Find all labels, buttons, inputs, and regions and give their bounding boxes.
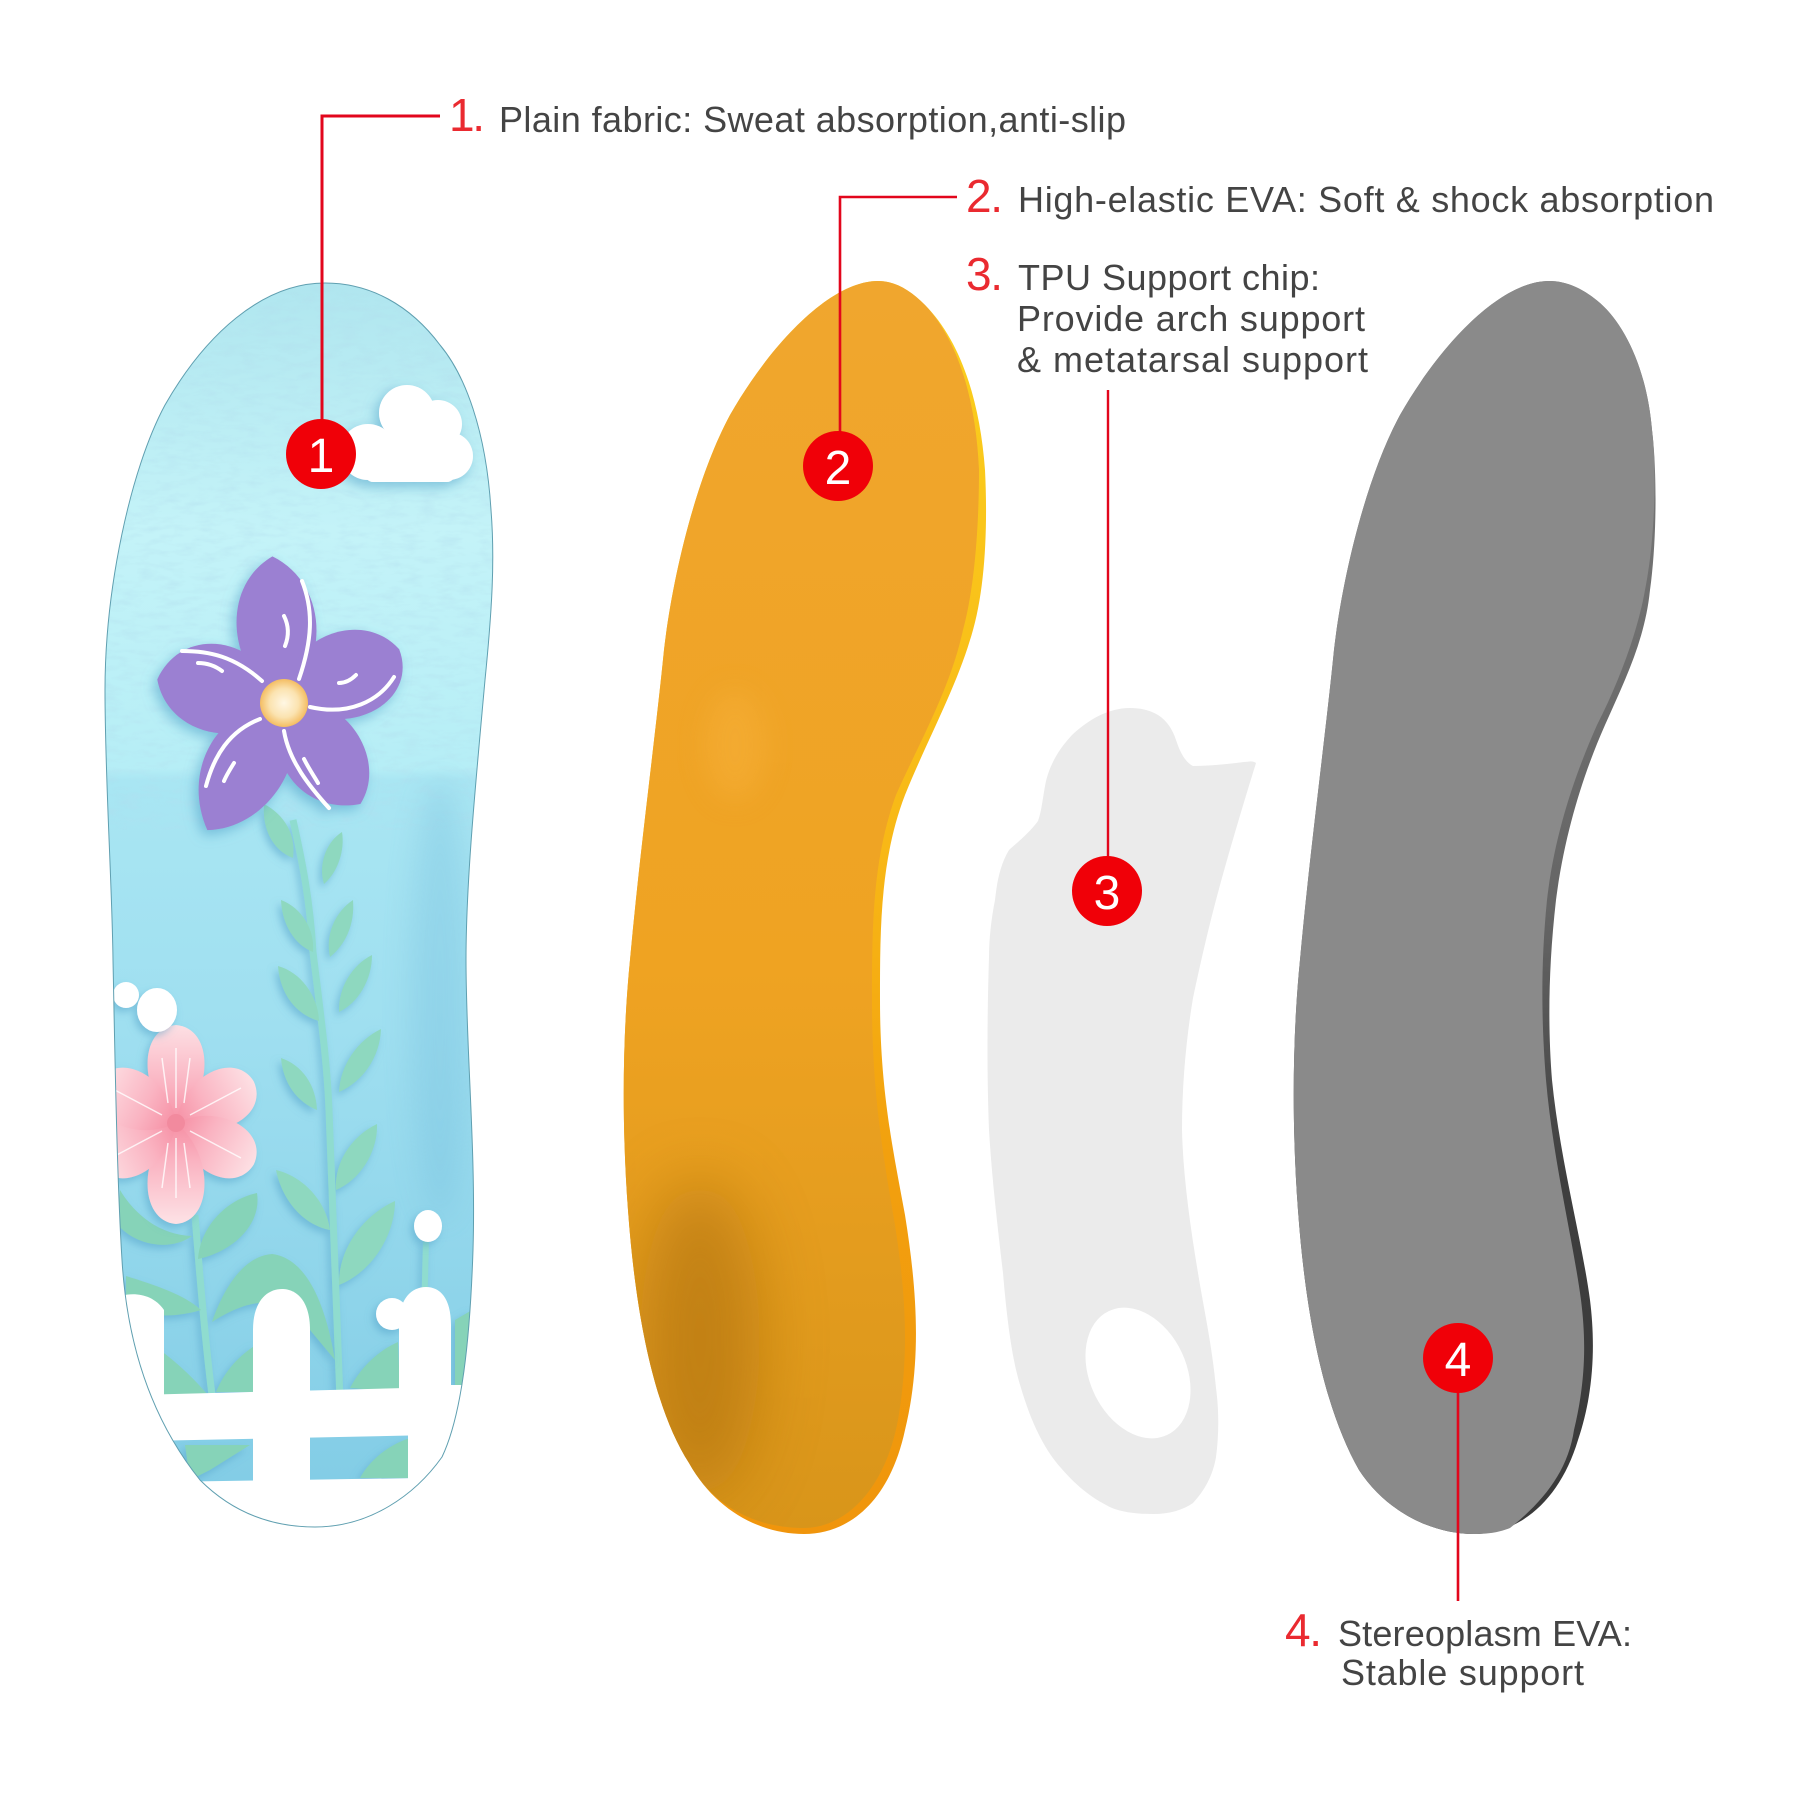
marker 3: 3 [1094, 867, 1120, 920]
leader line 4 [1457, 1385, 1459, 1601]
garden plants [118, 1190, 472, 1480]
label 3: & metatarsal support [1017, 339, 1368, 380]
label 1: 1. [449, 89, 485, 141]
TPU support chip 3 [988, 708, 1256, 1514]
label 3: TPU Support chip: [1018, 257, 1320, 298]
marker 4 [1423, 1323, 1493, 1393]
label 4 [1285, 1604, 1632, 1693]
label 2: 2. [966, 170, 1003, 222]
marker 1: 1 [308, 430, 334, 483]
icon: purple flower [148, 554, 414, 850]
label 2: High-elastic EVA: Soft & shock absorption [1018, 179, 1714, 220]
leader line 2 [840, 197, 957, 440]
picket fence [126, 1287, 462, 1526]
label 3: 3. [966, 248, 1003, 300]
label 3: Provide arch support [1017, 298, 1365, 339]
label 1: Plain fabric: Sweat absorption,anti-slip [499, 99, 1126, 140]
marker 2 [803, 431, 873, 501]
leader line 3 [1107, 390, 1109, 860]
label 4: Stable support [1341, 1652, 1584, 1693]
leader line 1 [322, 116, 440, 425]
icon: pink flower [116, 1025, 257, 1230]
marker 3 [1072, 856, 1142, 926]
tall stem with leaves [264, 804, 395, 1400]
marker 2: 2 [825, 442, 851, 495]
insole layer 2: high-elastic EVA [624, 281, 986, 1534]
icon: cloud [340, 385, 473, 482]
label 3 [966, 248, 1368, 380]
marker 4: 4 [1445, 1334, 1471, 1387]
label 4: Stereoplasm EVA: [1338, 1613, 1632, 1654]
insole layer 4: stereoplasm EVA [1294, 281, 1656, 1534]
insole layer 1: printed fabric [104, 282, 494, 1528]
icon: white berries [113, 982, 442, 1330]
marker 1 [286, 419, 356, 489]
label 4: 4. [1285, 1604, 1322, 1656]
